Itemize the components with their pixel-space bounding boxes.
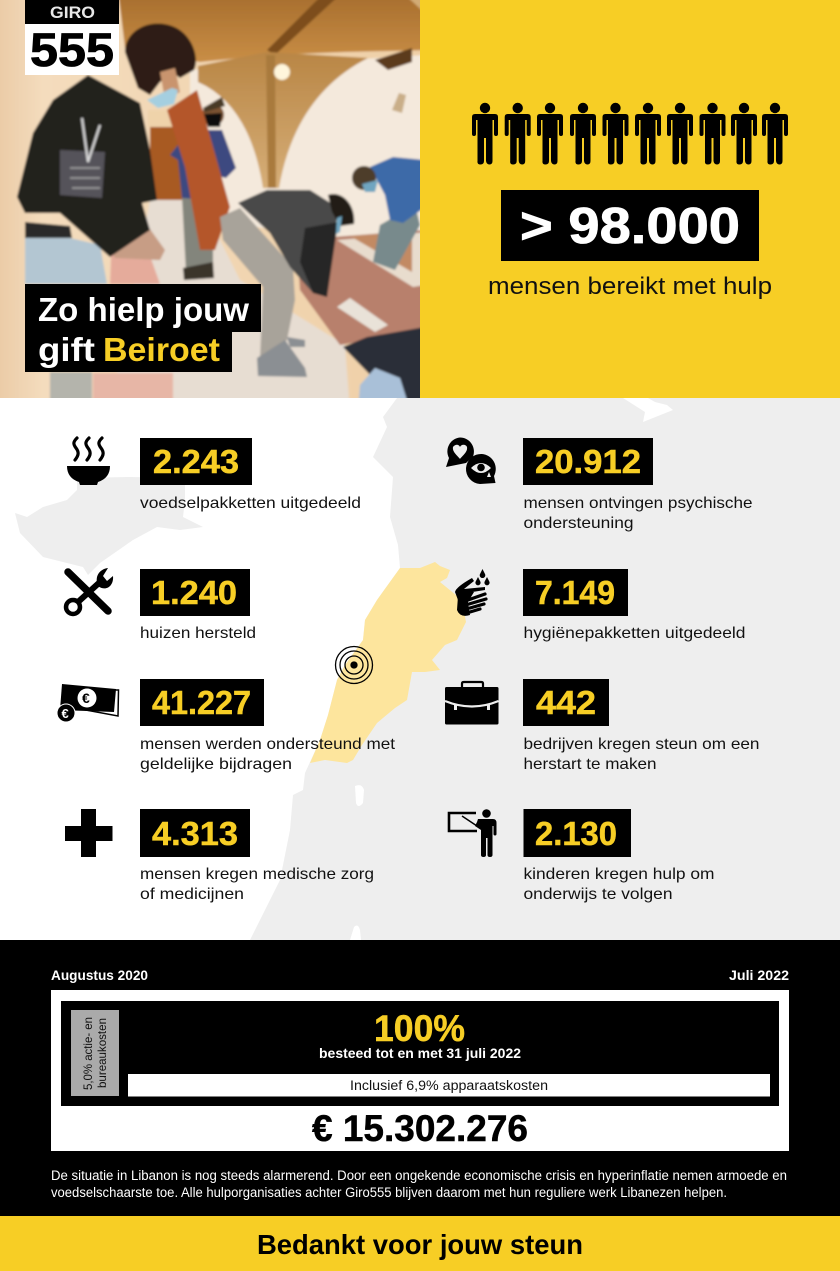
bending man xyxy=(220,208,295,360)
stat: children education: kinderen kregen hulp om xyxy=(524,866,714,883)
title: Zo hielp jouw xyxy=(38,291,249,328)
stat: businesses restarted: 442 xyxy=(536,684,596,721)
stat: food parcels xyxy=(67,438,361,512)
stat: food parcels: voedselpakketten uitgedeeld xyxy=(140,495,361,512)
stat: psychological support: ondersteuning xyxy=(524,515,634,532)
icon: washing hands with drops xyxy=(455,569,490,616)
stat: psychological support xyxy=(446,438,753,532)
stat: medical care: mensen kregen medische zorg xyxy=(140,866,374,883)
percentage spent: 100% xyxy=(374,1008,465,1049)
stat: houses repaired: 1.240 xyxy=(151,574,237,611)
stat: medical care: of medicijnen xyxy=(140,886,244,903)
closing paragraph xyxy=(51,1168,787,1200)
icon: briefcase xyxy=(445,682,498,724)
title xyxy=(25,284,261,372)
foreground person xyxy=(342,326,420,398)
caption: mensen bereikt met hulp xyxy=(488,273,772,300)
footer: thanks banner xyxy=(0,1216,840,1271)
big number xyxy=(501,190,759,261)
overhead bar: Inclusief 6,9% apparaatskosten xyxy=(350,1078,548,1093)
left man xyxy=(25,236,107,284)
right man xyxy=(373,205,420,270)
Lebanon xyxy=(310,562,466,763)
vault drape xyxy=(198,52,368,188)
logo: Giro 555: GIRO xyxy=(50,3,95,22)
stat: hygiene kits: 7.149 xyxy=(535,574,615,611)
stat: children education: 2.130 xyxy=(535,815,617,852)
overhead costs block xyxy=(71,1010,119,1096)
stat: houses repaired xyxy=(66,568,256,642)
icon: target marker xyxy=(336,646,372,684)
panel: people reached xyxy=(420,0,840,398)
icon: speech bubbles with heart and eye xyxy=(446,438,496,484)
stat: psychological support: 20.912 xyxy=(535,443,641,480)
closing paragraph: De situatie in Libanon is nog steeds alarmerend. Door een ongekende economische crisis en hyperinflatie nemen armoede en xyxy=(51,1168,787,1183)
Cyprus xyxy=(15,477,203,575)
icon: teacher at board xyxy=(449,809,496,857)
panel: photo of volunteers repairing a house xyxy=(0,0,430,410)
logo: Giro 555: 555 xyxy=(30,23,114,76)
walls xyxy=(190,55,425,240)
stat: psychological support: mensen ontvingen psychische xyxy=(524,495,753,512)
overhead bar xyxy=(128,1074,770,1096)
ceiling xyxy=(118,0,430,62)
icon: wrench and screwdriver xyxy=(66,568,113,614)
timeline end: Juli 2022 xyxy=(729,967,789,983)
man with plank xyxy=(182,197,213,272)
stat: houses repaired: huizen hersteld xyxy=(140,625,256,642)
stat: businesses restarted xyxy=(445,679,760,773)
stat: children education xyxy=(449,809,714,903)
map background xyxy=(15,398,840,940)
overhead costs block: bureaukosten xyxy=(95,1018,109,1088)
stat: children education: onderwijs te volgen xyxy=(524,886,672,903)
stat: businesses restarted: bedrijven kregen steun om een xyxy=(524,736,760,753)
icon: soup bowl xyxy=(67,438,110,485)
icon: banknotes with euro coins: € xyxy=(62,706,69,721)
total amount: € 15.302.276 xyxy=(312,1108,528,1149)
panel: spending summary xyxy=(0,940,840,1216)
stat: medical care xyxy=(65,809,374,903)
budget box: besteed tot en met 31 juli 2022 xyxy=(319,1045,521,1061)
title: Beiroet xyxy=(103,331,220,368)
stat: cash contributions: geldelijke bijdragen xyxy=(140,756,292,773)
closing paragraph: voedselschaarste toe. Alle hulporganisaties achter Giro555 blijven daarom met hun reguliere werk Libanezen helpen. xyxy=(51,1185,727,1200)
pink panel xyxy=(109,254,160,284)
stat: businesses restarted: herstart te maken xyxy=(524,756,656,773)
overhead costs block: 5,0% actie- en xyxy=(81,1017,95,1090)
stat: food parcels: 2.243 xyxy=(153,443,239,480)
stat: cash contributions: 41.227 xyxy=(152,684,251,721)
icon: banknotes with euro coins: € xyxy=(82,690,90,706)
stat: hygiene kits: hygiënepakketten uitgedeeld xyxy=(524,625,746,642)
stat: medical care: 4.313 xyxy=(152,815,238,852)
icon: row of ten people xyxy=(472,103,788,164)
icon: banknotes with euro coins xyxy=(57,684,118,722)
timeline start: Augustus 2020 xyxy=(51,967,148,983)
icon: medical cross xyxy=(65,809,112,857)
logo: Giro 555 xyxy=(25,0,119,76)
door and floor xyxy=(148,110,172,128)
title: gift xyxy=(38,331,95,368)
stat: cash contributions: mensen werden ondersteund met xyxy=(140,736,396,753)
big number: > 98.000 xyxy=(520,197,740,254)
stat: cash contributions xyxy=(57,679,396,773)
footer: thanks banner: Bedankt voor jouw steun xyxy=(257,1229,583,1260)
budget box xyxy=(51,990,789,1151)
stat: hygiene kits xyxy=(455,569,746,642)
